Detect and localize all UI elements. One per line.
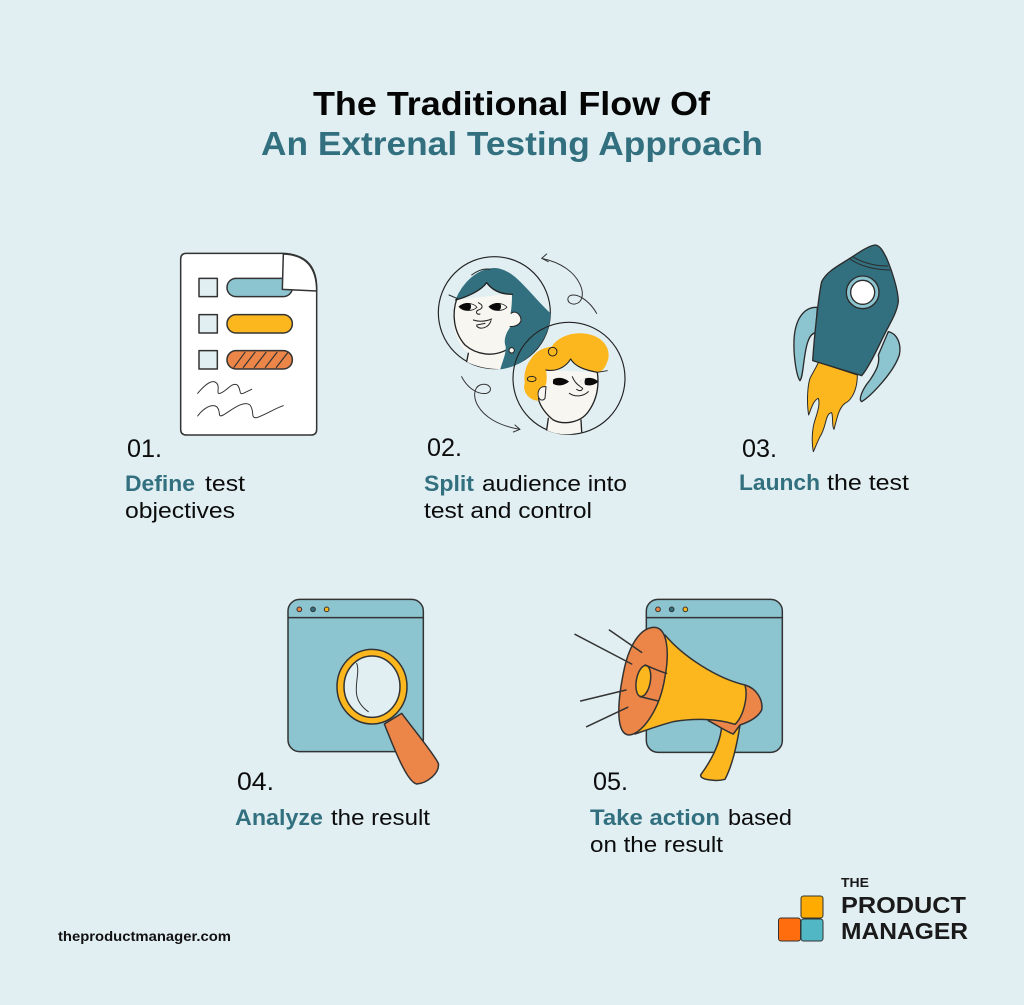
text: step 03: Launch	[739, 470, 820, 495]
icon: woman face	[438, 257, 550, 369]
text: step 02: 02.	[427, 434, 462, 462]
text: step 04	[235, 768, 430, 830]
text: step 01: objectives	[125, 498, 235, 523]
text: step 05: on the result	[590, 832, 723, 857]
title	[261, 85, 763, 162]
text: step 04: Analyze	[235, 805, 323, 830]
title: The Traditional Flow Of	[313, 85, 711, 122]
icon: browser window with magnifier	[288, 599, 438, 784]
text: step 03: 03.	[742, 435, 777, 463]
text: step 01	[125, 435, 245, 523]
text: step 03: the test	[827, 470, 909, 495]
icon: two faces with swap arrows	[438, 254, 625, 434]
text: step 01: test	[205, 471, 245, 496]
logo: The Product Manager	[778, 876, 968, 944]
icon: browser window with megaphone	[575, 599, 782, 780]
icon: rocket	[794, 245, 900, 452]
logo: The Product Manager: PRODUCT	[841, 892, 966, 918]
logo: The Product Manager: THE	[841, 876, 869, 890]
text: step 03	[739, 435, 909, 495]
text: step 01: 01.	[127, 435, 162, 463]
text: step 02: Split	[424, 471, 475, 496]
text: step 05	[590, 768, 792, 857]
text: step 02: audience into	[482, 471, 627, 496]
text: step 02: test and control	[424, 498, 592, 523]
text: step 05: 05.	[593, 768, 628, 796]
icon: man face	[513, 322, 625, 434]
title: An Extrenal Testing Approach	[261, 125, 763, 162]
footer url: theproductmanager.com	[58, 928, 231, 944]
text: step 04: 04.	[237, 768, 274, 796]
logo: The Product Manager: MANAGER	[841, 918, 968, 944]
text: step 01: Define	[125, 471, 195, 496]
text: step 02	[424, 434, 627, 523]
icon: checklist document	[181, 253, 317, 435]
icon: logo squares	[778, 896, 823, 941]
text: step 04: the result	[331, 805, 430, 830]
text: step 05: based	[728, 805, 792, 830]
arrow: top swap arrow	[542, 254, 597, 313]
arrow: bottom swap arrow	[462, 377, 520, 432]
text: step 05: Take action	[590, 805, 720, 830]
